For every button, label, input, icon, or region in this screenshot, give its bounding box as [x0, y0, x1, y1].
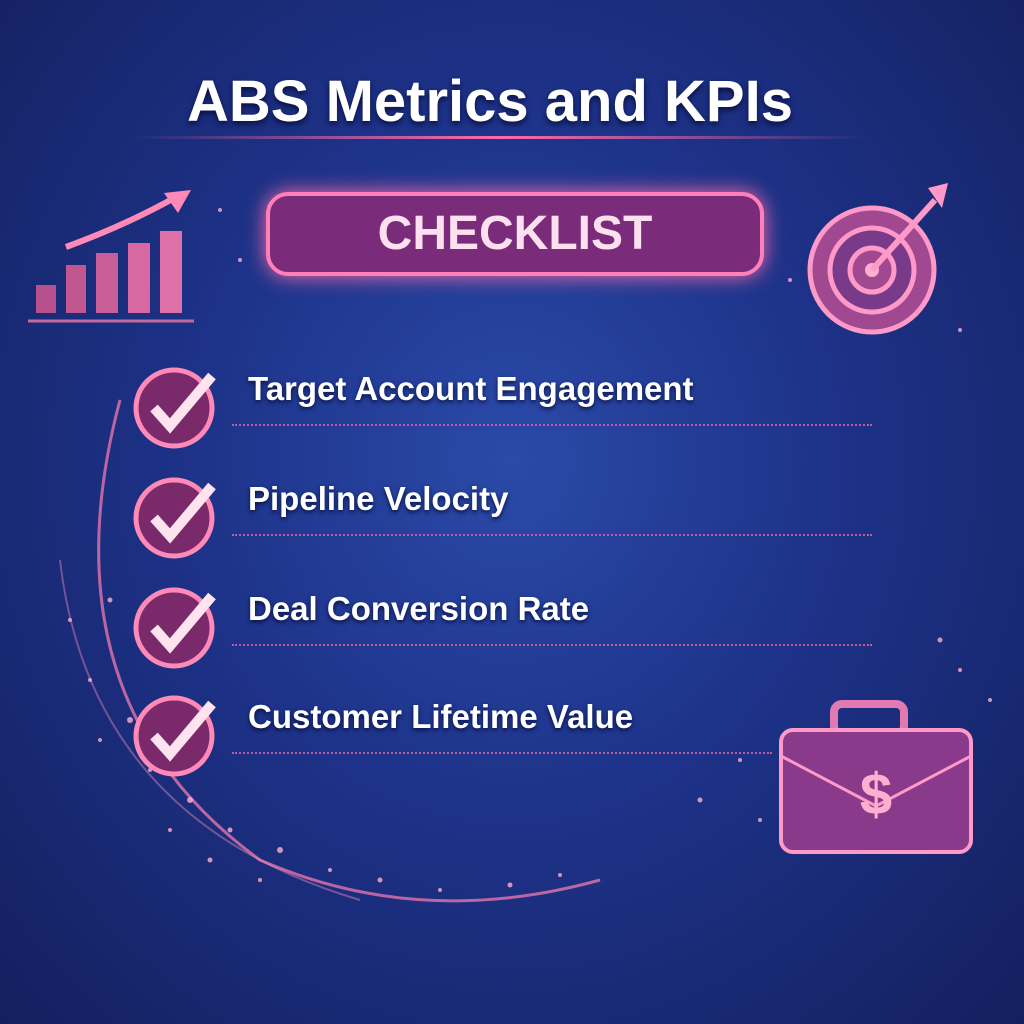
item 1: Target Account Engagement: [248, 370, 694, 407]
checklist items: [134, 368, 872, 776]
icon: target: [808, 183, 948, 334]
item 3: [134, 588, 872, 668]
item 4: [134, 696, 772, 776]
item 2: [134, 478, 872, 558]
icon: briefcase: $: [860, 762, 892, 827]
icon: bar chart: [28, 190, 194, 322]
checklist badge: CHECKLIST: [378, 207, 652, 260]
item 1: [134, 368, 872, 448]
checklist badge: [266, 192, 764, 276]
icon: briefcase: [779, 700, 973, 854]
item 2: Pipeline Velocity: [248, 480, 508, 517]
item 3: Deal Conversion Rate: [248, 590, 589, 627]
item 4: Customer Lifetime Value: [248, 698, 633, 735]
title: ABS Metrics and KPIs: [187, 69, 793, 134]
